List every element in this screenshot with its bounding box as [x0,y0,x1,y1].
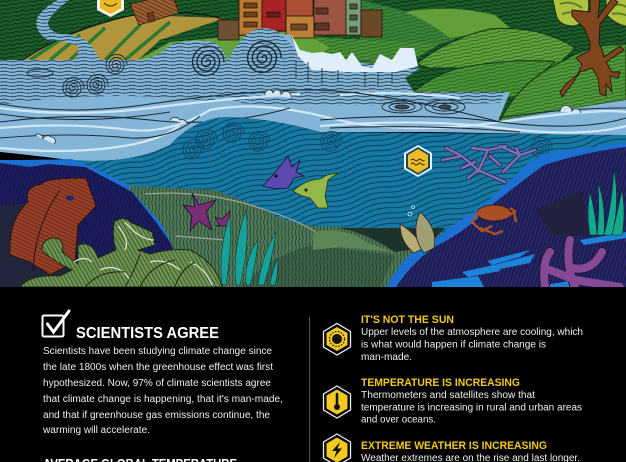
fish purple [263,156,304,189]
farm field [23,12,225,60]
item: temperature is increasing: and over oceans. [361,414,436,426]
item: temperature is increasing: Thermometers and satellites show that [361,390,535,401]
river water [0,0,626,161]
fish green [293,173,338,208]
item: it's not the sun: is what would happen if climate change is [361,340,546,350]
foam [35,34,581,144]
starfish [183,193,230,231]
red coral [10,178,96,275]
item: temperature is increasing [361,377,582,426]
item: it's not the sun: man-made. [361,352,412,363]
panel: black text area [0,287,626,462]
item: temperature is increasing: temperature is increasing in rural and urban areas [361,402,582,414]
clam shell [400,206,435,253]
river highlights and currents [0,93,626,151]
icon: checkbox [42,311,69,336]
text block: scientists paragraph: the late 1800s when the greenhouse effect was first [43,362,273,373]
item: it's not the sun [361,314,583,363]
item: it's not the sun: Upper levels of the atmosphere are cooling, which [361,327,583,338]
text block: scientists paragraph: Scientists have been studying climate change since [43,346,272,357]
sea fan [442,146,535,182]
green coral [20,218,222,287]
green hill under town [138,32,330,64]
item: temperature is increasing: TEMPERATURE IS INCREASING [361,377,520,389]
icon: thermometer hexagon [324,386,350,418]
farmhouse [130,0,179,25]
icon: top hexagon marker [97,0,124,17]
text block: scientists paragraph: hypothesized. Now, 97% of climate scientists agree [43,378,271,389]
icon: sun hexagon [324,324,350,355]
text block: scientists paragraph: warming will accelerate. [42,425,150,436]
heading: scientists agree: SCIENTISTS AGREE [76,325,219,342]
text block: scientists paragraph: that climate change is happening, that it's man-made, [43,394,283,405]
ocean [75,117,626,232]
text block: scientists paragraph [42,346,283,436]
panel: illustration [0,0,626,290]
seagrass right [588,168,624,235]
seabed [127,186,450,287]
item: it's not the sun: IT'S NOT THE SUN [361,314,454,326]
near hills [412,28,626,121]
icon: ocean hexagon marker [404,145,432,177]
item: extreme weather is increasing [361,440,580,462]
crab [472,205,516,234]
tree [552,0,626,97]
background hills [0,0,626,130]
left rock [0,159,180,290]
right rock [386,143,626,287]
seagrass left [221,210,278,285]
icon: lightning hexagon [324,434,350,462]
purple coral right [544,240,620,287]
item: extreme weather is increasing: EXTREME WEATHER IS INCREASING [361,440,547,452]
text block: scientists paragraph: and that if greenhouse gas emissions continue, the [43,410,270,421]
town buildings [218,0,382,40]
water swirls [27,41,465,114]
